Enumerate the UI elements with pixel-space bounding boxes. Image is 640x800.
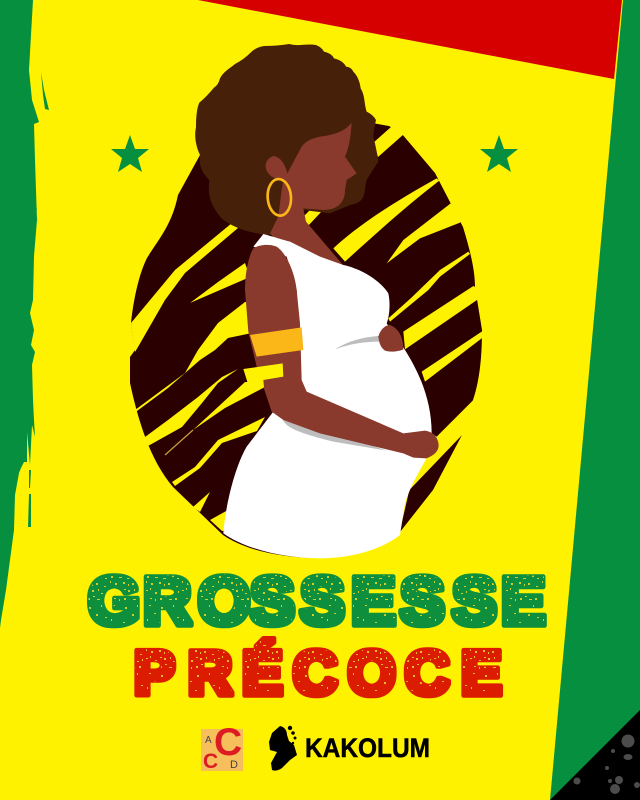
hand on belly bbox=[378, 325, 403, 352]
yellow stripes right bbox=[333, 127, 487, 523]
logo ACCD: D bbox=[230, 759, 238, 771]
title PRÉCOCE: PRÉCOCE bbox=[134, 639, 502, 707]
body bbox=[223, 234, 439, 558]
hair bbox=[195, 44, 378, 235]
icon: Africa footprint bbox=[269, 726, 297, 771]
earring bbox=[266, 178, 292, 216]
logo ACCD bbox=[201, 721, 243, 773]
face neck and ear bbox=[266, 123, 357, 265]
yellow stripes left bbox=[131, 223, 265, 531]
logo ACCD: A bbox=[205, 735, 212, 746]
logo ACCD: C bbox=[214, 721, 242, 764]
dark patterned oval bbox=[130, 123, 482, 558]
dress shadow upper bbox=[335, 336, 379, 349]
pregnant woman bbox=[195, 44, 439, 558]
black corner bbox=[550, 710, 640, 800]
left green brush band bbox=[0, 0, 49, 628]
dress shadow lower bbox=[283, 420, 387, 451]
title GROSSESSE: GROSSESSE bbox=[88, 564, 546, 639]
star left bbox=[111, 135, 149, 172]
small yellow wedge under chin bbox=[303, 210, 323, 227]
arm band tie bbox=[243, 363, 283, 387]
red top band bbox=[198, 0, 622, 79]
star right bbox=[480, 135, 518, 172]
arm bbox=[245, 245, 439, 458]
white dress bbox=[223, 234, 437, 558]
logo ACCD: C bbox=[203, 750, 218, 773]
logo Kakolum bbox=[269, 726, 430, 771]
right green band bbox=[550, 0, 640, 800]
arm band bbox=[250, 327, 303, 357]
wordmark: KAKOLUM bbox=[305, 733, 430, 763]
